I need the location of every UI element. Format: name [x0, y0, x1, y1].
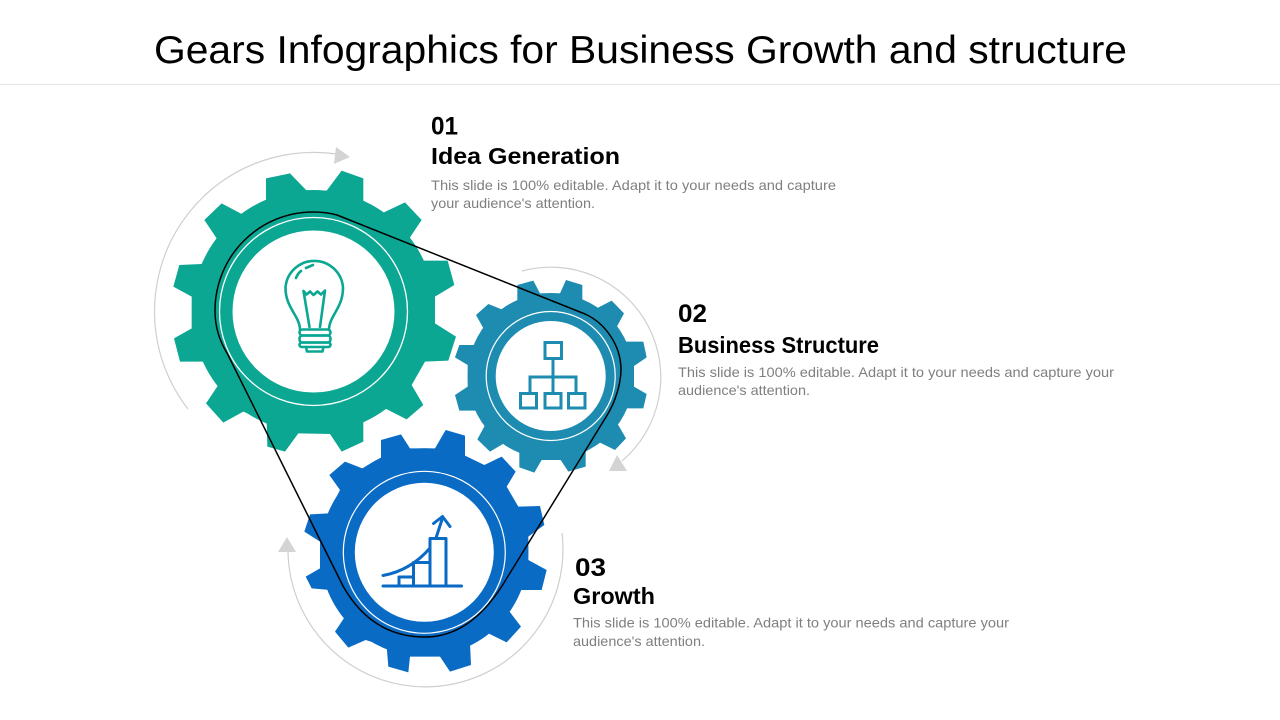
text block: 03 Growth: Growth: [573, 583, 655, 609]
text block: 03 Growth: [573, 554, 1009, 649]
text block: 03 Growth: 03: [575, 554, 606, 582]
text block: 02 Business Structure: audience's attention.: [678, 382, 810, 398]
text block: 01 Idea Generation: [431, 112, 836, 211]
gear 3: blue: [304, 430, 547, 672]
text block: 01 Idea Generation: your audience's attention.: [431, 195, 595, 211]
text block: 01 Idea Generation: Idea Generation: [431, 143, 620, 169]
title: Gears Infographics for Business Growth and structure: [154, 29, 1127, 72]
arrow: gear 1 rotation: [155, 147, 350, 409]
text block: 01 Idea Generation: This slide is 100% editable. Adapt it to your needs and capture: [431, 177, 836, 193]
text block: 03 Growth: This slide is 100% editable. Adapt it to your needs and capture your: [573, 614, 1009, 630]
arrow: gear 2 rotation: [522, 267, 661, 471]
text block: 02 Business Structure: Business Structure: [678, 332, 879, 358]
text block: 02 Business Structure: This slide is 100% editable. Adapt it to your needs and capture your: [678, 364, 1114, 380]
gear 2: blue-teal: [455, 280, 647, 473]
belt connecting the gears: [215, 212, 621, 637]
icon: growth chart: [383, 516, 462, 586]
text block: 03 Growth: audience's attention.: [573, 633, 705, 649]
arrow: gear 3 rotation: [278, 533, 563, 687]
gear 1: teal: [173, 171, 456, 452]
text block: 02 Business Structure: 02: [678, 300, 707, 328]
icon: light bulb: [286, 261, 343, 352]
icon: hierarchy chart: [520, 342, 585, 408]
text block: 02 Business Structure: [678, 300, 1114, 398]
text block: 01 Idea Generation: 01: [431, 112, 458, 140]
